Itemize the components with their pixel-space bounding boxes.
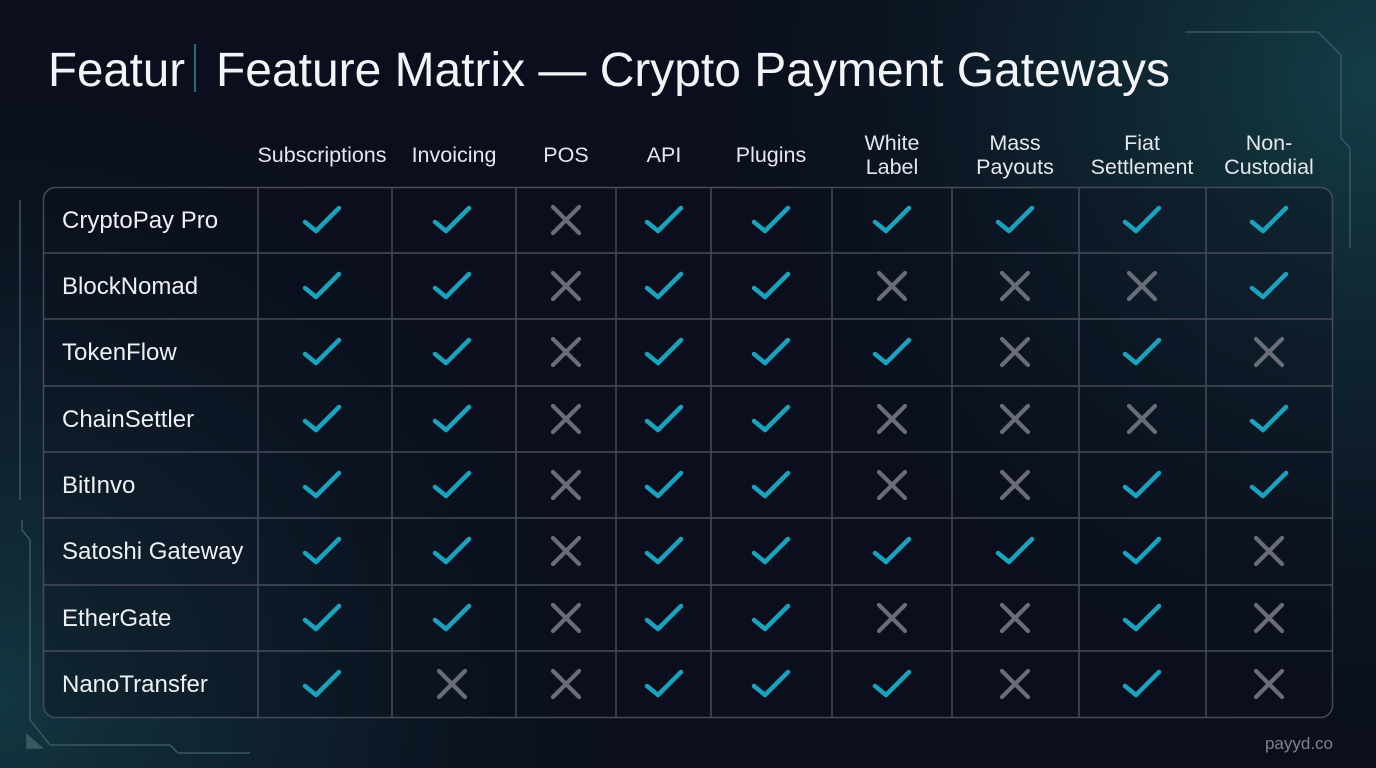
column headers: Label bbox=[866, 155, 918, 179]
row labels: NanoTransfer bbox=[62, 671, 208, 698]
row: NanoTransfer bbox=[305, 671, 1282, 697]
row: ChainSettler bbox=[305, 406, 1286, 432]
column headers: Plugins bbox=[736, 143, 806, 167]
column headers: API bbox=[647, 143, 681, 167]
title: Feature Matrix — Crypto Payment Gateways bbox=[216, 44, 1170, 97]
footer brand: payyd.co bbox=[1265, 734, 1333, 753]
row: BitInvo bbox=[305, 472, 1286, 498]
column headers: Non- bbox=[1246, 131, 1292, 155]
column headers: Payouts bbox=[976, 155, 1054, 179]
row labels: TokenFlow bbox=[62, 339, 177, 366]
row: BlockNomad bbox=[305, 273, 1286, 299]
column headers: Invoicing bbox=[412, 143, 496, 167]
row: CryptoPay Pro bbox=[305, 207, 1286, 233]
column headers: Fiat bbox=[1124, 131, 1160, 155]
row labels: Satoshi Gateway bbox=[62, 538, 243, 565]
row: EtherGate bbox=[305, 605, 1282, 631]
row labels: EtherGate bbox=[62, 605, 171, 632]
row: TokenFlow bbox=[305, 339, 1282, 365]
column headers: Subscriptions bbox=[257, 143, 387, 167]
row labels: BitInvo bbox=[62, 472, 135, 499]
column headers: White bbox=[865, 131, 919, 155]
column headers: Mass bbox=[989, 131, 1041, 155]
matrix table bbox=[43, 187, 1333, 718]
row labels bbox=[62, 207, 243, 698]
column headers bbox=[257, 131, 1314, 179]
title: Featur bbox=[48, 44, 185, 97]
row labels: CryptoPay Pro bbox=[62, 207, 218, 234]
row: Satoshi Gateway bbox=[305, 538, 1282, 564]
column headers: Settlement bbox=[1091, 155, 1193, 179]
column headers: Custodial bbox=[1224, 155, 1314, 179]
row labels: ChainSettler bbox=[62, 406, 194, 433]
column headers: POS bbox=[543, 143, 589, 167]
row labels: BlockNomad bbox=[62, 273, 198, 300]
